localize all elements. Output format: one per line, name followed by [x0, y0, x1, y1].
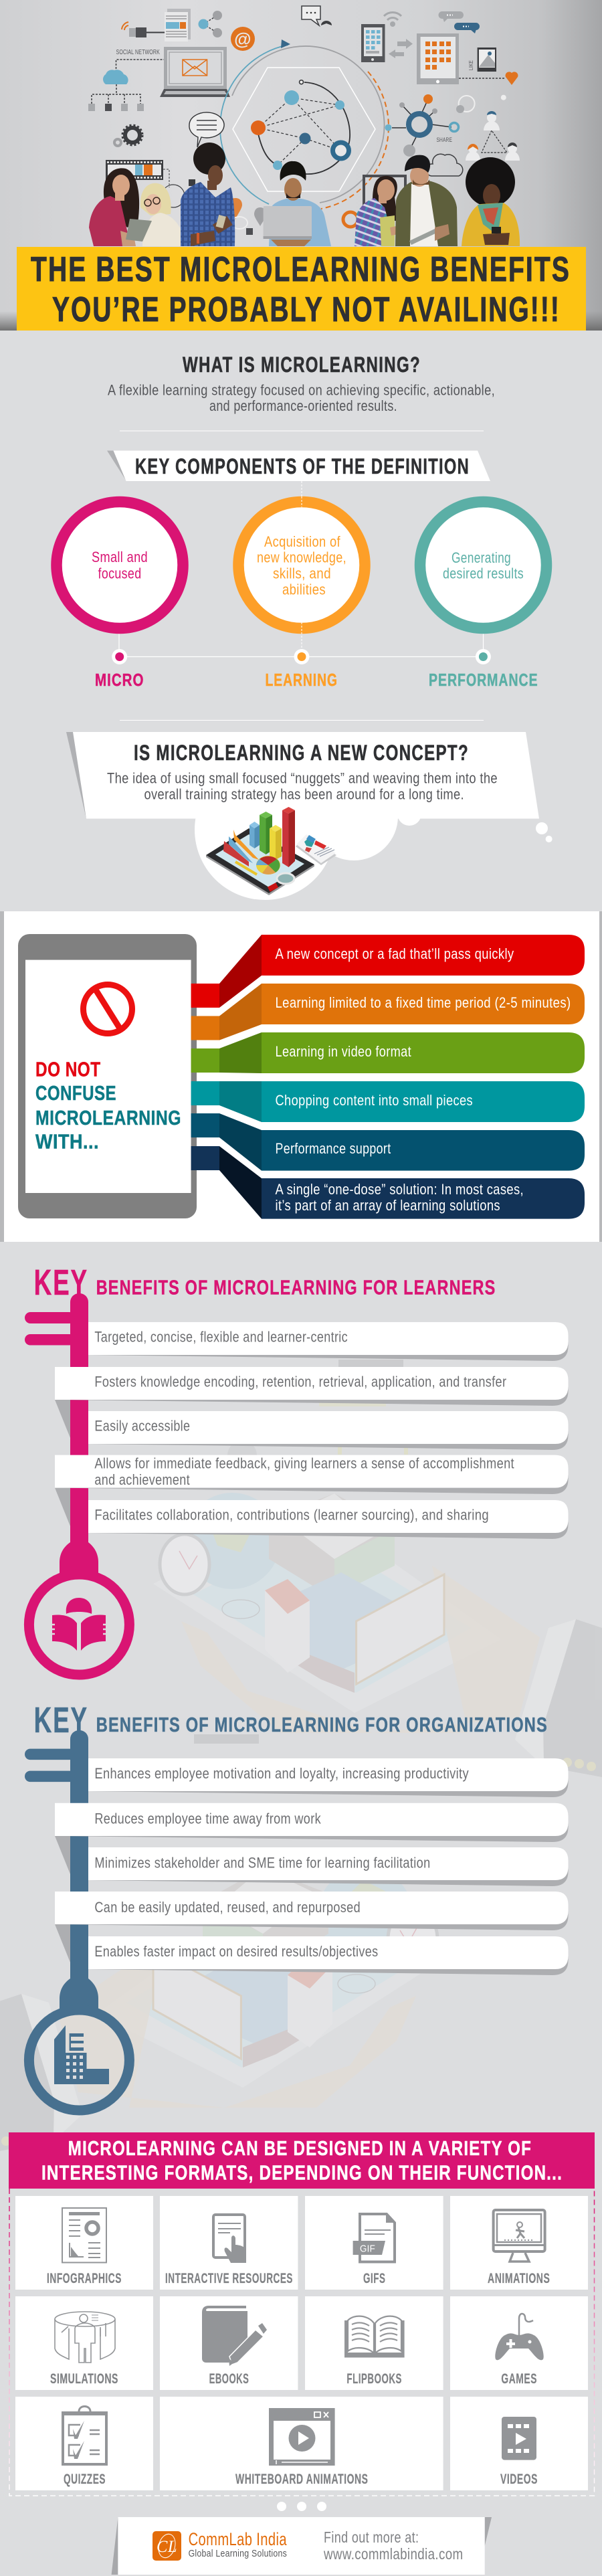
tile: infographics [15, 2196, 153, 2290]
tile: infographics: INFOGRAPHICS [47, 2271, 122, 2286]
text: commlab india [189, 2529, 287, 2559]
person: man in blue check shirt [181, 143, 235, 246]
label: learning: LEARNING [265, 670, 338, 690]
row: reduces time away: Reduces employee time away from work [94, 1811, 321, 1827]
icon: gears [114, 125, 142, 146]
row: easily updated: Can be easily updated, reused, and repurposed [94, 1899, 361, 1916]
tile: flipbooks [305, 2296, 443, 2390]
heading: what is microlearning: WHAT IS MICROLEARNING? [183, 353, 421, 377]
tile: quizzes: QUIZZES [64, 2472, 106, 2487]
text: new concept: The idea of using small focused “nuggets” and weaving them into the [107, 769, 498, 786]
circle: learning: skills, and [273, 565, 331, 582]
icon: film strip [106, 160, 169, 187]
heading: do not confuse microlearning with: DO NOT [35, 1057, 101, 1081]
icon: laptop with envelope [160, 47, 230, 97]
dot: learning [294, 649, 309, 664]
icon: usb wifi and document [122, 9, 191, 41]
ribbon: single one-dose solution: it’s part of an array of learning solutions [276, 1197, 500, 1214]
circle: performance: Generating [452, 549, 511, 566]
ribbon: single one-dose solution: A single “one-dose” solution: In most cases, [276, 1181, 524, 1198]
panel: benefits for organizations [25, 1700, 569, 2110]
person: woman in maroon shirt [89, 168, 139, 246]
circle: micro: focused [98, 565, 142, 582]
panel: benefits for learners [25, 1263, 569, 1675]
tile: simulations [15, 2296, 153, 2390]
tile: whiteboard animations: WHITEBOARD ANIMATIONS [235, 2472, 368, 2487]
row: reduces time away [55, 1803, 569, 1836]
panel: key components [56, 451, 546, 690]
ribbon: performance support: Performance support [276, 1140, 391, 1157]
connector lines [119, 634, 483, 657]
heading banner: key components: KEY COMPONENTS OF THE DEFINITION [135, 454, 470, 478]
row: immediate feedback: Allows for immediate feedback, giving learners a sense of accomplishment [94, 1455, 514, 1472]
icon: speech bubble top [302, 6, 332, 25]
text: find out more: www.commlabindia.com [323, 2545, 463, 2563]
ribbon: performance support [191, 1113, 585, 1171]
tile: interactive resources: INTERACTIVE RESOURCES [165, 2271, 293, 2286]
icon: wifi grey [384, 12, 401, 25]
ribbon: single one-dose solution [191, 1146, 585, 1219]
tile: gifs [305, 2196, 443, 2290]
row: faster impact [88, 1936, 569, 1969]
icon: image card with like: LIKE [468, 60, 474, 70]
tile: simulations: SIMULATIONS [50, 2371, 118, 2387]
row: collaboration [88, 1500, 569, 1533]
icon: tablet with tiles [417, 33, 459, 84]
icon: tablet held [126, 219, 152, 242]
heading: do not confuse microlearning with [35, 1057, 181, 1154]
text: find out more: Find out more at: [324, 2528, 419, 2546]
tile: whiteboard animations [160, 2397, 443, 2490]
row shadows [55, 1774, 569, 1975]
circle: micro [56, 502, 183, 628]
tile: flipbooks: FLIPBOOKS [346, 2371, 402, 2387]
row: accessible [88, 1411, 569, 1444]
tile: games [450, 2296, 588, 2390]
icon: commlab logo [153, 2531, 181, 2561]
icon: phone [18, 934, 197, 1218]
row: easily updated [55, 1892, 569, 1924]
person: woman in purple plaid [355, 176, 415, 246]
header illustration [0, 0, 602, 331]
text: commlab india: Global Learning Solutions [189, 2548, 287, 2559]
tile: animations [450, 2196, 588, 2290]
row: immediate feedback [55, 1455, 569, 1488]
circle: learning: new knowledge, [257, 549, 346, 565]
ribbon: chopping content [191, 1081, 585, 1122]
icon: central hexagon network [220, 39, 389, 209]
text: definition: A flexible learning strategy focused on achieving specific, actionable, [108, 381, 495, 399]
row: collaboration: Facilitates collaboration, contributions (learner sourcing), and sharing [94, 1507, 489, 1523]
icon: office building [54, 2025, 109, 2084]
icon: at sign: @ [234, 29, 252, 49]
pagination dots [277, 2502, 326, 2511]
icon: team avatars [466, 111, 520, 161]
icon: reader with book [52, 1598, 106, 1651]
dot: micro [112, 649, 127, 664]
icon: cloud hierarchy [88, 60, 164, 111]
icon: pins and squares [162, 179, 358, 235]
text: definition: and performance-oriented results. [209, 397, 397, 414]
icon: at sign [231, 27, 255, 51]
person: man with cap and olive jacket [395, 155, 458, 246]
row: accessible: Easily accessible [94, 1418, 190, 1435]
row: enhances motivation: Enhances employee motivation and loyalty, increasing productivity [94, 1765, 469, 1782]
text: definition [108, 381, 495, 414]
banner: formats heading [9, 2132, 595, 2189]
panel: do not confuse [0, 911, 602, 1242]
faint background illustration: learners [153, 1360, 602, 1777]
icon: monitor frame and cloud [364, 154, 463, 216]
ribbon: fixed time period [191, 984, 585, 1040]
faint background illustration: organizations [0, 1734, 444, 2152]
icon: phone [361, 24, 385, 62]
tile: gifs: GIF [360, 2243, 375, 2255]
person: man with turban and laptop [264, 161, 331, 246]
circle: learning [238, 502, 365, 628]
text: find out more [323, 2528, 463, 2563]
heading: new concept: IS MICROLEARNING A NEW CONCEPT? [134, 741, 469, 765]
tile: gifs: GIFS [363, 2271, 385, 2286]
tile: animations: ANIMATIONS [488, 2271, 550, 2286]
panel: is microlearning a new concept [66, 732, 553, 900]
person: blonde woman [140, 183, 185, 246]
panel: footer [112, 2517, 492, 2575]
row shadows [55, 1338, 569, 1539]
ribbon: new concept or fad: A new concept or a fad that’ll pass quickly [276, 945, 514, 962]
icon: hub cluster [385, 94, 459, 157]
tile: interactive resources [160, 2196, 298, 2290]
row: fosters [55, 1367, 569, 1400]
heading banner: key components [107, 451, 490, 481]
icon: no sign [83, 985, 132, 1033]
label: performance: PERFORMANCE [429, 670, 538, 690]
key graphic [25, 1293, 129, 1675]
row: minimizes stakeholder time [88, 1847, 569, 1880]
ribbon: video format [191, 1032, 585, 1073]
heading: do not confuse microlearning with: MICROLEARNING [35, 1106, 181, 1129]
label: micro: MICRO [95, 670, 144, 690]
text: new concept: overall training strategy has been around for a long time. [144, 786, 464, 802]
ribbon: new concept or fad [191, 935, 585, 1008]
heading: key: KEY [34, 1263, 88, 1303]
row: enhances motivation [88, 1758, 569, 1791]
tile: ebooks: EBOOKS [209, 2371, 249, 2387]
tile: games: GAMES [501, 2371, 537, 2387]
row: targeted [88, 1322, 569, 1355]
row: targeted: Targeted, concise, flexible and learner-centric [94, 1329, 348, 1346]
label: share: SHARE [436, 136, 452, 144]
icon: image card with like [459, 48, 518, 85]
icon: chat bubbles [439, 11, 480, 33]
text: new concept [107, 769, 498, 802]
icon: tablet with 3d charts [206, 807, 336, 895]
icon: message bubble left [189, 112, 224, 147]
text: commlab india: CommLab India [189, 2529, 287, 2549]
icon: sync arrows [389, 39, 413, 58]
row: minimizes stakeholder time: Minimizes stakeholder and SME time for learning facilitation [94, 1855, 431, 1871]
ribbon: video format: Learning in video format [276, 1043, 411, 1060]
tile: videos [450, 2397, 588, 2490]
panel: formats [9, 2132, 595, 2511]
heading: key: KEY [34, 1700, 88, 1740]
tile: ebooks [160, 2296, 298, 2390]
key graphic [25, 1730, 129, 2110]
heading: do not confuse microlearning with: CONFUSE [35, 1081, 116, 1105]
icon: ring decoration [456, 95, 506, 113]
row: faster impact: Enables faster impact on desired results/objectives [94, 1943, 379, 1960]
icon: share nodes [198, 11, 222, 37]
tile: quizzes [15, 2397, 153, 2490]
circle: learning: Acquisition of [264, 533, 340, 550]
icon: commlab logo: CL [157, 2538, 177, 2556]
ribbon: chopping content: Chopping content into small pieces [276, 1092, 473, 1109]
person: woman in yellow cardigan [462, 157, 520, 246]
circle: micro: Small and [92, 549, 148, 565]
circle: learning: abilities [282, 581, 326, 598]
row: fosters: Fosters knowledge encoding, retention, retrieval, application, and transfer [94, 1373, 506, 1390]
tile: videos: VIDEOS [500, 2472, 538, 2487]
heading: do not confuse microlearning with: WITH... [35, 1130, 99, 1154]
circle: performance [420, 502, 546, 628]
dot: performance [476, 649, 491, 664]
title banner [17, 247, 586, 331]
circle: performance: desired results [443, 565, 524, 582]
cloud bubble [195, 759, 553, 900]
row: immediate feedback: and achievement [94, 1471, 190, 1488]
label: social network: SOCIAL NETWORK [116, 48, 160, 56]
